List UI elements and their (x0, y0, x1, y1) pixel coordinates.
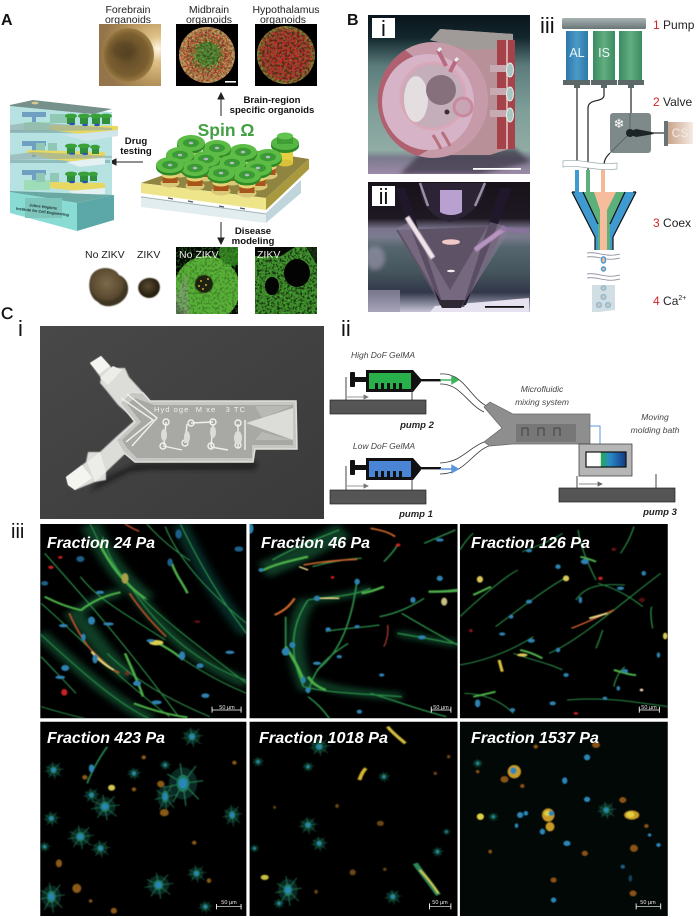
CS syringe (652, 121, 693, 146)
scale labels: 50 µm (432, 900, 448, 906)
schematic: coextrusion system (562, 18, 695, 312)
molding bath (579, 444, 632, 476)
label ii: ii (341, 316, 351, 341)
image: ZIKV fluorescence (255, 247, 317, 314)
step 3: 3 Coex (653, 216, 691, 230)
micrograph: 1537 Pa (460, 722, 668, 916)
heading: hypothalamus organoids: Hypothalamus (252, 4, 320, 16)
label: No ZIKV bright field: No ZIKV (85, 249, 125, 261)
label iii: iii (540, 13, 555, 38)
scale labels: 50 µm (640, 900, 656, 906)
scale labels (219, 705, 657, 906)
device: Spin Omega plate with gears (141, 132, 309, 223)
label C: C (1, 304, 13, 323)
syringe: high DoF: High DoF GelMA (351, 350, 415, 360)
mixer chip (484, 402, 590, 446)
schematic: microfluidic mixing setup (330, 350, 680, 520)
inset label ii: ii (379, 184, 388, 209)
step 1: 1 Pump (653, 18, 695, 32)
label: moving molding bath: Moving (641, 412, 669, 422)
micrograph: 24 Pa (40, 524, 246, 718)
device: stacked tower (10, 100, 118, 231)
label IS: IS (598, 46, 610, 60)
label: drug testing: Drug (125, 136, 147, 147)
label: disease modeling: modeling (232, 236, 274, 247)
label: pump 2: pump 2 (399, 420, 435, 431)
panel label: 126 Pa: Fraction 126 Pa (471, 535, 590, 552)
tubing (577, 88, 631, 170)
heading: midbrain organoids: Midbrain (189, 4, 229, 16)
panel A: Spin Omega bioreactor (1, 4, 320, 322)
micrograph: 1018 Pa (250, 722, 458, 916)
step 4: 4 Ca (653, 294, 678, 308)
scale labels: 50 µm (221, 900, 237, 906)
micrographs grid (39, 523, 668, 916)
scale bars (212, 707, 661, 909)
cylinders (566, 31, 642, 80)
inset label ii (372, 184, 395, 209)
inset label: ZIKV (257, 249, 280, 261)
chip lettering: Hyd oge M xe 3 TC (154, 405, 246, 414)
panel label: 1018 Pa: Fraction 1018 Pa (259, 730, 388, 747)
heading: forebrain organoids: organoids (105, 14, 151, 26)
arrow: blue flow (440, 466, 458, 472)
label: pump 1: pump 1 (398, 509, 433, 520)
stream breaks (587, 253, 620, 280)
image: hypothalamus organoid (255, 24, 317, 86)
label: microfluidic mixing system: mixing system (515, 397, 569, 407)
label iii: iii (11, 521, 24, 543)
micrograph: 126 Pa (460, 524, 668, 718)
inset label i: i (381, 16, 386, 41)
arrow up to organoids (218, 93, 224, 116)
syringe: low DoF (350, 441, 441, 480)
syringe: high DoF (350, 350, 441, 392)
arrow down to disease models (218, 222, 224, 244)
syringe: low DoF: Low DoF GelMA (353, 441, 415, 451)
photo i: printed device (368, 15, 530, 174)
tubing break (563, 160, 617, 170)
arrow left to tower (110, 159, 143, 165)
droplets (597, 257, 610, 307)
label: ZIKV bright field: ZIKV (137, 249, 160, 261)
tower base caption: Institute for Cell Engineering (16, 206, 70, 217)
panel C: microfluidic hydrogel mixer (1, 304, 680, 916)
panel B: 3D printed nozzle (347, 12, 695, 312)
label A: A (1, 12, 13, 29)
inset label i (372, 16, 395, 41)
calcium bath (592, 285, 615, 312)
CS syringe: CS (672, 126, 688, 140)
heading: midbrain organoids: organoids (186, 14, 232, 26)
label: disease modeling: Disease (235, 226, 271, 237)
heading: hypothalamus organoids: organoids (260, 14, 306, 26)
panel label: 46 Pa: Fraction 46 Pa (261, 535, 370, 552)
pump 1 base (330, 466, 426, 504)
micrograph: 46 Pa (250, 524, 458, 718)
flow to bath (590, 426, 603, 451)
label i: i (18, 316, 23, 341)
title: Spin Omega: Spin Ω (198, 120, 254, 140)
panel label: 1537 Pa: Fraction 1537 Pa (471, 730, 599, 747)
image: No ZIKV blob (89, 268, 128, 306)
valve block (610, 113, 654, 153)
label: pump 3: pump 3 (642, 507, 678, 518)
arrow: green flow (440, 376, 458, 384)
inset label: No ZIKV (179, 249, 219, 261)
scale labels: 50 µm (433, 705, 449, 711)
image: forebrain organoid (99, 24, 161, 86)
coextrusion funnel (572, 192, 636, 250)
label: moving molding bath: molding bath (631, 425, 680, 435)
image: ZIKV blob (138, 278, 160, 298)
photo ii: nozzle tip (365, 182, 530, 312)
valve block: ❄ (614, 116, 624, 131)
scale labels: 50 µm (219, 705, 235, 711)
label: brain-region specific organoids: Brain-region (243, 95, 301, 106)
heading: forebrain organoids: Forebrain (106, 4, 150, 16)
pump bar (562, 18, 646, 29)
coloured feed lines (577, 170, 603, 194)
pump 2 base (330, 377, 426, 414)
step 2: 2 Valve (653, 95, 692, 109)
panel label: 423 Pa: Fraction 423 Pa (47, 730, 165, 747)
photo: printed Y mixer (40, 326, 324, 519)
label: drug testing: testing (120, 146, 152, 157)
panel label: 24 Pa: Fraction 24 Pa (47, 535, 155, 552)
label B: B (347, 12, 359, 29)
step 4: 2+ (678, 295, 686, 302)
image: midbrain organoid (176, 24, 238, 86)
image: No ZIKV fluorescence (176, 247, 238, 314)
scale labels: 50 µm (641, 705, 657, 711)
label: microfluidic mixing system: Microfluidic (521, 384, 563, 394)
micrograph: 423 Pa (40, 722, 246, 916)
label: brain-region specific organoids: specific organoids (230, 105, 314, 116)
label AL: AL (569, 46, 585, 60)
tower base caption: Johns Hopkins (29, 202, 57, 211)
tubing (440, 374, 489, 474)
pump 3 base (559, 474, 675, 502)
